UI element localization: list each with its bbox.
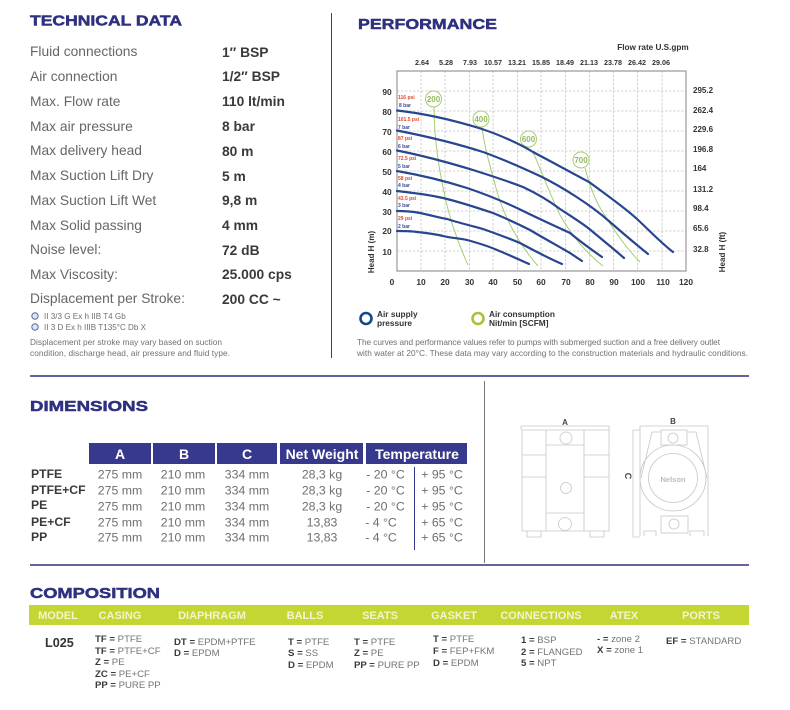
right axis labels: [693, 86, 714, 254]
right axis labels: 131.2: [693, 185, 714, 194]
pressure labels: 116 psi: [398, 95, 415, 101]
diaphragm options: [174, 637, 256, 659]
performance note: [356, 337, 748, 358]
pressure labels: 72.5 psi: [398, 156, 417, 162]
diaphragm options: DT = EPDM+PTFE: [174, 637, 256, 648]
air consumption curves: 600: [522, 135, 536, 144]
spec list: Air connection: [30, 69, 117, 84]
table rows: 28,3 kg: [302, 500, 342, 514]
ports options: EF = STANDARD: [666, 636, 741, 647]
pressure labels: 43.5 psi: [398, 196, 417, 202]
spec list: 8 bar: [222, 119, 256, 134]
table rows: - 20 °C: [366, 468, 405, 482]
pressure labels: 7 bar: [398, 125, 410, 131]
right axis labels: 295.2: [693, 86, 714, 95]
pressure labels: 87 psi: [398, 136, 413, 142]
diaphragm options: D = EPDM: [174, 648, 220, 659]
spec list: 200 CC ~: [222, 292, 281, 307]
left axis labels: 70: [382, 127, 392, 137]
spec list: 80 m: [222, 144, 253, 159]
header bar: CASING: [99, 610, 141, 622]
left axis labels: 30: [382, 207, 392, 217]
air consumption curves: 700: [574, 156, 588, 165]
table header: B: [179, 446, 189, 462]
air consumption curves: [426, 91, 640, 266]
table rows: 210 mm: [161, 516, 205, 530]
heading: technical data: TECHNICAL DATA: [30, 12, 182, 30]
legend: air supply pressure: pressure: [377, 318, 412, 328]
gasket options: D = EPDM: [433, 658, 479, 669]
header bar: MODEL: [38, 610, 78, 622]
spec list: Max air pressure: [30, 119, 133, 134]
table rows: 210 mm: [161, 530, 205, 544]
top axis labels: 13.21: [508, 58, 526, 67]
spec list: [30, 44, 292, 307]
seats options: PP = PURE PP: [354, 660, 420, 671]
spec list: Max. Flow rate: [30, 94, 121, 109]
bottom axis labels: 50: [513, 277, 522, 287]
seats options: [354, 637, 420, 671]
balls options: [288, 637, 334, 671]
air pressure curves: [397, 110, 673, 264]
grid: [397, 71, 686, 271]
pressure labels: 58 psi: [398, 176, 413, 182]
header bar: SEATS: [362, 610, 398, 622]
top axis labels: 18.49: [556, 58, 574, 67]
seats options: Z = PE: [354, 648, 384, 659]
spec list: Noise level:: [30, 242, 101, 257]
gasket options: T = PTFE: [433, 634, 474, 645]
pressure labels: 6 bar: [398, 144, 410, 150]
left axis labels: [382, 87, 392, 257]
header bar: CONNECTIONS: [500, 610, 582, 622]
gasket options: F = FEP+FKM: [433, 646, 494, 657]
table rows: 275 mm: [98, 500, 142, 514]
casing options: Z = PE: [95, 657, 125, 668]
balls options: D = EPDM: [288, 660, 334, 671]
left axis labels: 90: [382, 87, 392, 97]
table rows: 334 mm: [225, 468, 269, 482]
right axis labels: 32.8: [693, 245, 709, 254]
header bar: BALLS: [287, 610, 323, 622]
table rows: 210 mm: [161, 484, 205, 498]
table rows: 13,83: [307, 530, 338, 544]
bottom axis labels: 70: [561, 277, 571, 287]
table rows: 275 mm: [98, 468, 142, 482]
table rows: PTFE: [31, 467, 62, 481]
left axis labels: 10: [382, 247, 392, 257]
right axis labels: 262.4: [693, 106, 714, 115]
left axis labels: 40: [382, 187, 392, 197]
right axis labels: 229.6: [693, 125, 714, 134]
atex options: [597, 634, 643, 656]
ATEX marks: II 3 D Ex h IIIB T135°C Db X: [44, 323, 147, 332]
header bar: PORTS: [682, 610, 720, 622]
spec list: Max Suction Lift Wet: [30, 193, 156, 208]
right axis labels: 98.4: [693, 204, 709, 213]
pressure labels: 5 bar: [398, 164, 410, 170]
right axis labels: 65.6: [693, 224, 709, 233]
legend: air supply pressure: [360, 309, 418, 328]
performance chart: [367, 43, 727, 287]
bottom axis labels: 80: [585, 277, 595, 287]
table rows: - 4 °C: [365, 516, 397, 530]
table header: C: [242, 446, 252, 462]
header bar: ATEX: [610, 610, 639, 622]
bottom axis labels: 120: [679, 277, 693, 287]
top axis labels: 23.78: [604, 58, 622, 67]
spec list: 4 mm: [222, 218, 258, 233]
spec list: 1/2″ BSP: [222, 69, 280, 84]
balls options: S = SS: [288, 648, 318, 659]
spec list: 25.000 cps: [222, 267, 292, 282]
table rows: PTFE+CF: [31, 483, 86, 497]
table header: [89, 443, 467, 464]
spec list: 5 m: [222, 169, 246, 184]
dimension drawing: side view: [623, 417, 708, 537]
table rows: 210 mm: [161, 468, 205, 482]
left axis labels: 60: [382, 147, 392, 157]
pressure labels: 3 bar: [398, 203, 410, 209]
casing options: ZC = PE+CF: [95, 669, 150, 680]
table header: Net Weight: [286, 446, 359, 462]
spec list: Max Suction Lift Dry: [30, 168, 154, 183]
table rows: [31, 467, 463, 544]
panel: composition: [29, 585, 749, 691]
header bar: [29, 605, 749, 625]
connections options: [521, 635, 583, 669]
table rows: - 20 °C: [366, 484, 405, 498]
spec list: 9,8 m: [222, 193, 257, 208]
legend: air consumption: [472, 309, 555, 328]
table rows: + 95 °C: [421, 484, 463, 498]
top axis labels: 26.42: [628, 58, 646, 67]
pressure labels: [398, 95, 420, 230]
displacement note: [30, 337, 230, 358]
casing options: TF = PTFE+CF: [95, 646, 161, 657]
connections options: 5 = NPT: [521, 658, 557, 669]
header bar: DIAPHRAGM: [178, 610, 246, 622]
top axis labels: 15.85: [532, 58, 550, 67]
air consumption curves: 400: [474, 115, 488, 124]
table rows: PP: [31, 530, 47, 544]
table rows: PE: [31, 498, 47, 512]
dimension drawing: front view: A: [562, 418, 568, 427]
casing options: TF = PTFE: [95, 634, 142, 645]
spec list: Fluid connections: [30, 44, 137, 59]
pressure labels: 101.5 psi: [398, 117, 420, 123]
table rows: 275 mm: [98, 516, 142, 530]
heading: performance: PERFORMANCE: [358, 16, 497, 33]
legend: air supply pressure: Air supply: [377, 309, 418, 319]
left axis labels: 80: [382, 107, 392, 117]
table header: A: [115, 446, 125, 462]
top axis labels: 2.64: [415, 58, 429, 67]
right axis labels: 164: [693, 164, 707, 173]
table rows: 210 mm: [161, 500, 205, 514]
ATEX marks: II 3/3 G Ex h IIB T4 Gb: [44, 312, 126, 321]
pressure labels: 2 bar: [398, 224, 410, 230]
connections options: 1 = BSP: [521, 635, 556, 646]
dimension drawing: side view: B: [670, 417, 676, 426]
bottom axis labels: 100: [631, 277, 645, 287]
table rows: 275 mm: [98, 530, 142, 544]
table rows: 28,3 kg: [302, 484, 342, 498]
seats options: T = PTFE: [354, 637, 395, 648]
left axis labels: 50: [382, 167, 392, 177]
panel: technical data: [30, 12, 292, 358]
model code: L025: [45, 636, 74, 650]
table rows: - 20 °C: [366, 500, 405, 514]
bottom axis labels: 40: [488, 277, 498, 287]
spec list: Max Viscosity:: [30, 267, 118, 282]
top axis labels: 29.06: [652, 58, 670, 67]
top axis title: Flow rate U.S.gpm: [617, 43, 689, 52]
table header: Temperature: [375, 446, 459, 462]
right axis title: Head H (ft): [718, 231, 727, 272]
table rows: 334 mm: [225, 484, 269, 498]
table rows: + 65 °C: [421, 530, 463, 544]
dimensions table: [31, 443, 467, 550]
pressure labels: 29 psi: [398, 216, 413, 222]
top axis labels: 10.57: [484, 58, 502, 67]
displacement note: condition, discharge head, air pressure and fluid type.: [30, 348, 230, 358]
left axis title: Head H (m): [367, 231, 376, 273]
displacement note: Displacement per stroke may vary based on suction: [30, 337, 222, 347]
performance note: The curves and performance values refer to pumps with submerged suction and a free delivery outlet: [357, 337, 721, 347]
table rows: + 95 °C: [421, 468, 463, 482]
table rows: 334 mm: [225, 516, 269, 530]
casing options: [95, 634, 161, 691]
ATEX marks: [32, 312, 147, 332]
balls options: T = PTFE: [288, 637, 329, 648]
table rows: + 95 °C: [421, 500, 463, 514]
panel: performance: [356, 16, 748, 358]
gasket options: [433, 634, 494, 669]
performance note: with water at 20°C. These data may vary according to the construction materials and hydraulic conditions.: [356, 348, 748, 358]
atex options: - = zone 2: [597, 634, 640, 645]
bottom axis labels: 110: [656, 277, 670, 287]
header bar: GASKET: [431, 610, 477, 622]
table rows: - 4 °C: [365, 530, 397, 544]
bottom axis labels: 0: [390, 277, 395, 287]
atex options: X = zone 1: [597, 645, 643, 656]
top axis labels: 21.13: [580, 58, 598, 67]
bottom axis labels: 20: [440, 277, 450, 287]
table rows: 13,83: [307, 516, 338, 530]
table rows: 334 mm: [225, 500, 269, 514]
spec list: 110 lt/min: [222, 94, 285, 109]
left axis labels: 20: [382, 226, 392, 236]
spec list: Displacement per Stroke:: [30, 291, 185, 306]
heading: dimensions: DIMENSIONS: [30, 398, 148, 415]
spec list: 1″ BSP: [222, 45, 268, 60]
bottom axis labels: 30: [465, 277, 474, 287]
panel: dimensions: [30, 381, 708, 563]
bottom axis labels: 90: [609, 277, 619, 287]
table rows: PE+CF: [31, 515, 71, 529]
dimension drawing: side view: C: [623, 473, 633, 480]
bottom axis labels: [390, 277, 693, 287]
table rows: 28,3 kg: [302, 468, 342, 482]
top axis labels: 5.28: [439, 58, 453, 67]
table rows: 275 mm: [98, 484, 142, 498]
top axis labels: 7.93: [463, 58, 477, 67]
legend: air consumption: Air consumption: [489, 309, 555, 319]
table rows: 334 mm: [225, 530, 269, 544]
spec list: 72 dB: [222, 243, 260, 258]
bottom axis labels: 60: [536, 277, 546, 287]
casing options: PP = PURE PP: [95, 680, 161, 691]
connections options: 2 = FLANGED: [521, 647, 583, 658]
spec list: Max Solid passing: [30, 218, 142, 233]
air consumption curves: 200: [427, 95, 441, 104]
pressure labels: 4 bar: [398, 183, 410, 189]
heading: composition: COMPOSITION: [30, 585, 160, 602]
right axis labels: 196.8: [693, 145, 714, 154]
legend: air consumption: Nit/min [SCFM]: [489, 318, 549, 328]
table rows: + 65 °C: [421, 516, 463, 530]
top axis labels: [415, 58, 670, 67]
pressure labels: 8 bar: [399, 103, 411, 109]
dimension drawing: side view: Nelson: [660, 475, 686, 484]
dimension drawing: front view: [521, 418, 609, 537]
spec list: Max delivery head: [30, 143, 142, 158]
bottom axis labels: 10: [416, 277, 426, 287]
